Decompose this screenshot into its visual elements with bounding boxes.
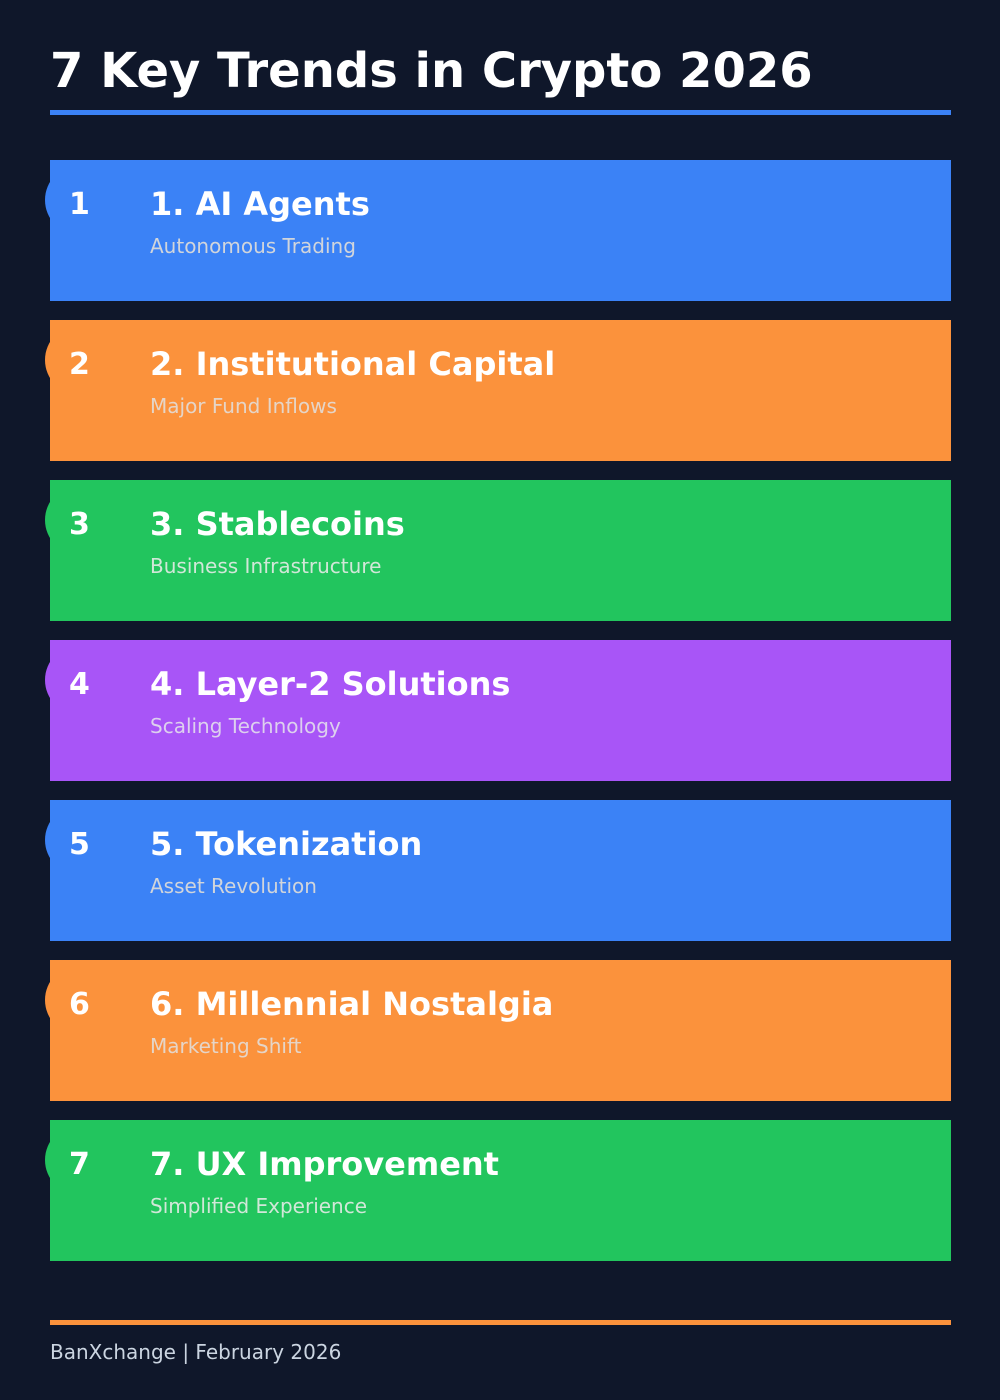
panel: 7 UX Improvement: 7 [69,1147,90,1182]
panel: 3 Stablecoins [45,480,951,621]
panel: 5 Tokenization: 5. Tokenization [150,825,422,863]
panel: 2 Institutional Capital: Major Fund Inflows [150,394,337,418]
panel: 6 Millennial Nostalgia: Marketing Shift [150,1034,302,1058]
panel: 4 Layer-2 Solutions: Scaling Technology [150,714,341,738]
panel: 5 Tokenization: 5 [69,827,90,862]
panel: 4 Layer-2 Solutions [45,640,951,781]
panel: 3 Stablecoins: Business Infrastructure [150,554,381,578]
panel: 5 Tokenization: Asset Revolution [150,874,317,898]
panel: 4 Layer-2 Solutions: 4. Layer-2 Solutions [150,665,510,703]
panel: 2 Institutional Capital: 2 [69,347,90,382]
panel: 6 Millennial Nostalgia: 6. Millennial Nostalgia [150,985,553,1023]
panel: 5 Tokenization [45,800,951,941]
panel: 7 UX Improvement: Simplified Experience [150,1194,367,1218]
panel: 1 AI Agents: 1 [69,187,90,222]
panel: 1 AI Agents [45,160,951,301]
panel: 7 UX Improvement: 7. UX Improvement [150,1145,499,1183]
panel: 2 Institutional Capital [45,320,951,461]
panel: 2 Institutional Capital: 2. Institutional Capital [150,345,555,383]
panel: 6 Millennial Nostalgia: 6 [69,987,90,1022]
panel: 1 AI Agents: Autonomous Trading [150,234,356,258]
panel: 6 Millennial Nostalgia [45,960,951,1101]
panel: 7 UX Improvement [45,1120,951,1261]
panel: 1 AI Agents: 1. AI Agents [150,185,370,223]
panel: 3 Stablecoins: 3. Stablecoins [150,505,405,543]
panel: 4 Layer-2 Solutions: 4 [69,667,90,702]
footer: BanXchange | February 2026 [50,1340,341,1364]
panel: 3 Stablecoins: 3 [69,507,90,542]
title: 7 Key Trends in Crypto 2026 [50,43,813,99]
